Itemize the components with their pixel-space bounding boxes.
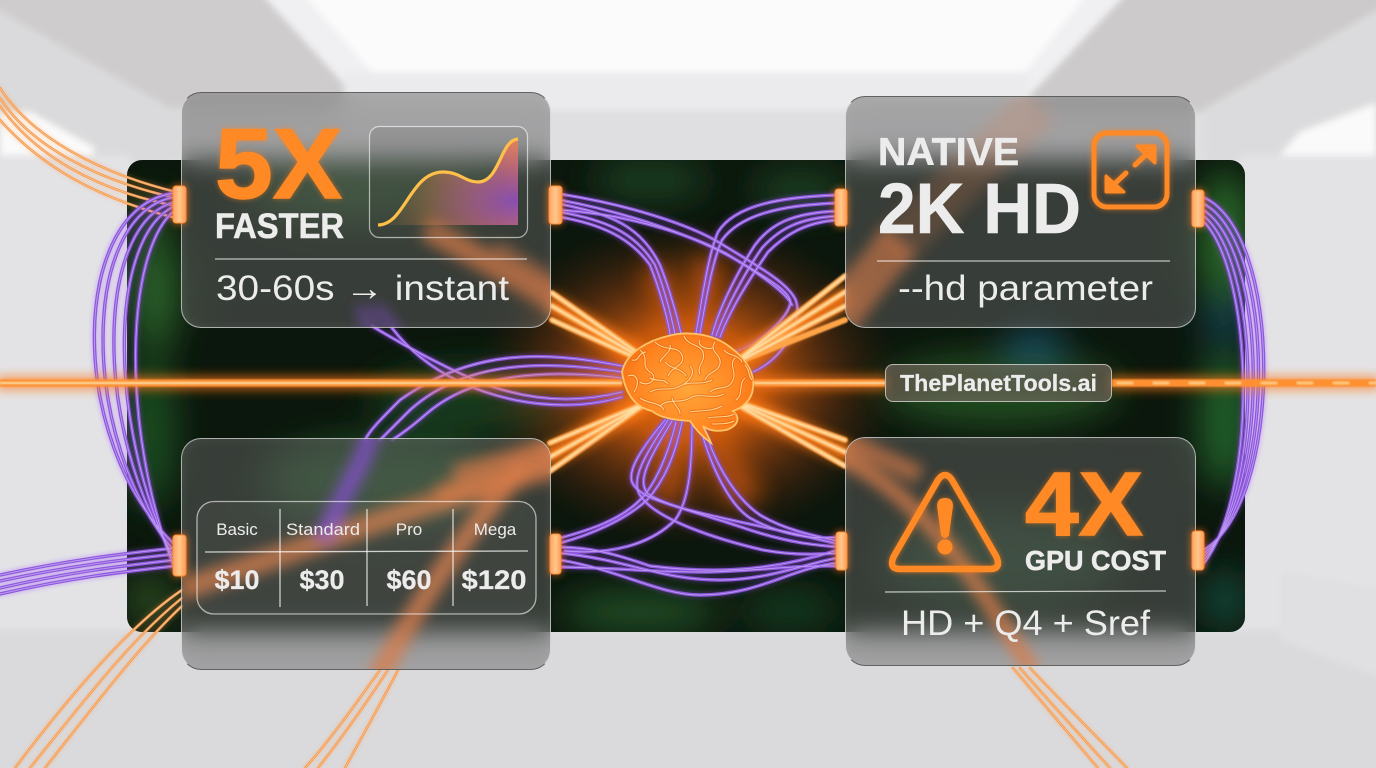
- panel: 5X faster: [181, 92, 551, 328]
- panel: pricing: [181, 438, 551, 670]
- label: NATIVE: NATIVE: [878, 130, 1018, 174]
- panel: native 2K HD: [845, 96, 1196, 328]
- icon: warning triangle: [892, 474, 998, 568]
- text: brand name: ThePlanetTools.ai: [900, 370, 1096, 396]
- pricing table: Basic: [216, 520, 258, 538]
- heading: 4X: 4X: [1024, 454, 1142, 554]
- text: cost factors: HD + Q4 + Sref: [900, 604, 1150, 642]
- pricing table: $30: [299, 564, 344, 594]
- pricing table: $60: [386, 564, 431, 594]
- light streaks behind glass: [180, 430, 570, 680]
- text: speed comparison: 30-60s → instant: [216, 268, 509, 308]
- pricing table: Standard: [286, 520, 360, 538]
- halo around brain: [473, 217, 903, 547]
- brain: [622, 333, 753, 443]
- pricing table: Mega: [473, 520, 516, 538]
- text: hd parameter: --hd parameter: [898, 268, 1153, 308]
- heading: 5X: 5X: [214, 108, 342, 218]
- label: GPU COST: GPU COST: [1024, 544, 1166, 576]
- orange light rays: [0, 276, 1376, 471]
- label: FASTER: FASTER: [214, 206, 344, 246]
- pricing table: $120: [461, 564, 526, 594]
- light streaks behind glass: [834, 436, 1034, 674]
- light streaks behind glass: [360, 228, 570, 334]
- line chart: [369, 126, 527, 237]
- forest window: [125, 160, 1251, 632]
- panel: GPU cost warning: [845, 437, 1196, 666]
- pricing table: [196, 501, 536, 614]
- heading: 2K HD: 2K HD: [878, 170, 1080, 248]
- brand pill: [885, 364, 1112, 402]
- pricing table: Pro: [395, 520, 422, 538]
- light streaks behind glass: [834, 104, 1040, 320]
- icon: expand arrows: [1094, 132, 1166, 206]
- pricing table: $10: [214, 564, 259, 594]
